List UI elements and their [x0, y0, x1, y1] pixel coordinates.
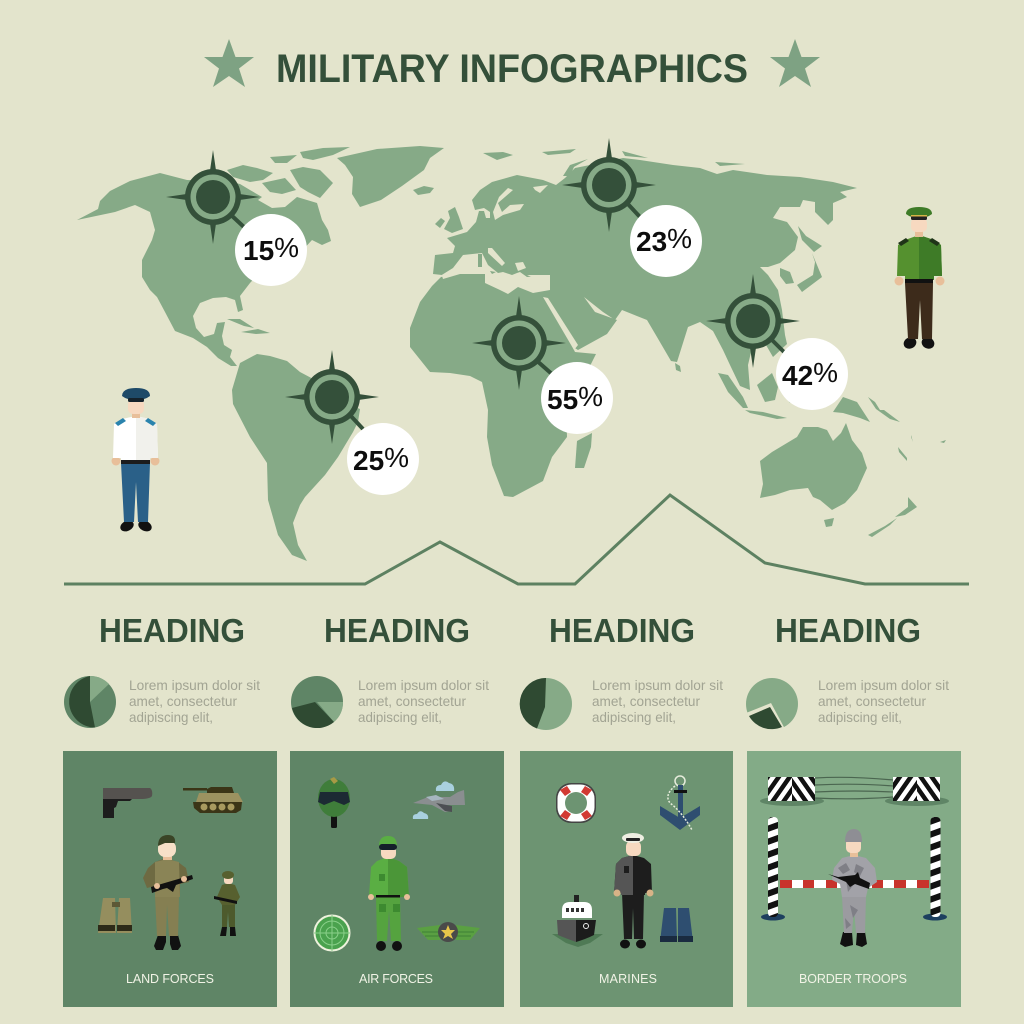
icon: radar	[314, 915, 350, 951]
pie chart 2	[291, 676, 343, 728]
New Zealand	[868, 497, 917, 537]
Arctic islands	[227, 165, 273, 182]
Sri Lanka	[675, 363, 681, 372]
label: land forces: LAND FORCES	[126, 972, 214, 986]
text block 3: Lorem ipsum dolor sit	[592, 677, 723, 693]
Japan	[797, 253, 822, 292]
callout: 55%: 55	[547, 384, 578, 415]
heading 1: HEADING	[99, 612, 245, 649]
pie chart 4	[746, 678, 798, 732]
pin: Russia	[562, 138, 656, 232]
figure: soldier with rifle	[143, 835, 193, 950]
figure: small camouflage soldier	[214, 871, 240, 936]
Sardinia and Sicily	[478, 254, 496, 274]
callout: 23%: 23	[636, 226, 667, 257]
label: border troops: BORDER TROOPS	[799, 972, 907, 986]
Pacific islands	[898, 435, 946, 461]
inland seas	[442, 185, 578, 350]
panel: border troops	[747, 751, 961, 1007]
callout: 42%: %	[813, 357, 838, 388]
left post	[761, 817, 785, 920]
icon: right star	[770, 39, 820, 87]
Indonesia	[718, 373, 748, 408]
text block 2	[358, 677, 489, 725]
callout: 15%: %	[274, 232, 299, 263]
callout: 23%	[630, 205, 702, 277]
striped barrier bar	[780, 880, 929, 888]
callout: 55%	[541, 362, 613, 434]
icon: left star	[204, 39, 254, 87]
figure: naval officer	[614, 833, 654, 948]
icon: ship	[552, 895, 603, 947]
callout: 42%: 42	[782, 360, 813, 391]
panel: land forces	[63, 751, 277, 1007]
title	[204, 39, 820, 91]
callout: 55%: %	[578, 381, 603, 412]
text block 3: amet, consectetur	[592, 693, 700, 709]
text block 1: amet, consectetur	[129, 693, 237, 709]
text block 3	[592, 677, 723, 725]
panel: marines	[520, 751, 733, 1007]
South America	[232, 354, 360, 561]
pin: South East Asia	[706, 274, 800, 368]
icon: tank	[183, 787, 243, 813]
Caribbean islands	[227, 319, 270, 334]
Novaya Zemlya and arctic islands	[483, 149, 745, 176]
panel: air forces	[290, 751, 504, 1007]
text block 4	[818, 677, 949, 725]
map land masses	[77, 146, 946, 561]
Greenland	[337, 146, 444, 207]
icon: cloud upper	[436, 781, 454, 791]
title text: MILITARY INFOGRAPHICS	[276, 47, 748, 91]
text block 4: amet, consectetur	[818, 693, 926, 709]
callout: 25%	[347, 423, 419, 495]
text block 1	[129, 677, 260, 725]
icon: binoculars	[98, 898, 132, 933]
Eurasia	[433, 158, 857, 390]
Sakhalin	[798, 226, 822, 252]
Madagascar	[575, 433, 592, 468]
heading 3: HEADING	[549, 612, 695, 649]
heading 4: HEADING	[775, 612, 921, 649]
text block 4: adipiscing elit,	[818, 709, 902, 725]
callout: 42%	[776, 338, 848, 410]
barbed wire barrier	[760, 777, 949, 806]
line chart	[64, 495, 969, 584]
icon: fighter jet	[413, 790, 465, 812]
right post	[923, 817, 947, 920]
icon: navy binoculars	[660, 908, 693, 942]
icon: cloud lower	[413, 811, 428, 819]
pin: South America	[285, 350, 379, 444]
text block 2: Lorem ipsum dolor sit	[358, 677, 489, 693]
Iceland	[413, 186, 434, 195]
world map	[77, 146, 946, 561]
UK and Ireland	[444, 207, 463, 233]
icon: pistol	[103, 788, 152, 818]
callout: 23%: %	[667, 223, 692, 254]
Australia	[760, 423, 867, 510]
callout: 15%: 15	[243, 235, 274, 266]
icon: lifebuoy	[556, 783, 596, 823]
icon: pilot helmet	[318, 777, 350, 828]
North America	[77, 173, 331, 366]
text block 4: Lorem ipsum dolor sit	[818, 677, 949, 693]
pie chart 3	[520, 678, 572, 730]
pin: North America	[166, 150, 260, 244]
figure: white-uniform officer	[112, 388, 160, 533]
figure: border soldier	[828, 829, 877, 947]
Korea	[780, 268, 794, 284]
text block 3: adipiscing elit,	[592, 709, 676, 725]
label: marines: MARINES	[599, 972, 657, 986]
figure: pilot	[368, 836, 410, 951]
heading 2: HEADING	[324, 612, 470, 649]
text block 2: amet, consectetur	[358, 693, 466, 709]
callout: 25%: %	[384, 442, 409, 473]
pin: Africa	[472, 296, 566, 390]
text block 1: adipiscing elit,	[129, 709, 213, 725]
callout: 15%	[235, 214, 307, 286]
icon: anchor	[660, 776, 700, 830]
text block 2: adipiscing elit,	[358, 709, 442, 725]
pie chart 1	[64, 676, 116, 728]
figure: green-uniform officer	[894, 207, 944, 351]
callout: 25%: 25	[353, 445, 384, 476]
label: air forces: AIR FORCES	[359, 972, 433, 986]
Africa	[410, 272, 596, 497]
text block 1: Lorem ipsum dolor sit	[129, 677, 260, 693]
icon: wings badge	[417, 922, 480, 942]
